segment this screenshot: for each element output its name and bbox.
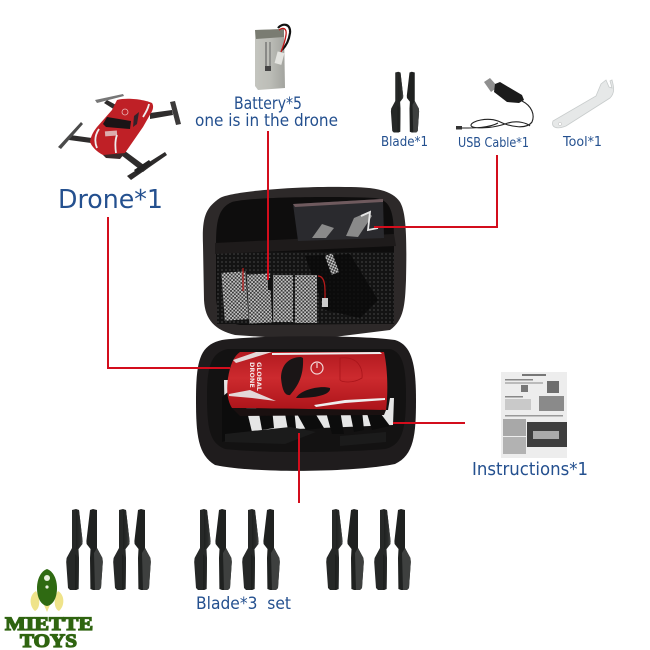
folded paper bbox=[224, 380, 394, 432]
label: usb cable: USB Cable*1 bbox=[458, 136, 529, 151]
label: instructions: Instructions*1 bbox=[472, 460, 588, 480]
logo: Miette Toys bbox=[5, 569, 93, 650]
icon: usb cable bbox=[456, 78, 533, 130]
instructions manual bbox=[501, 372, 567, 458]
logo: Miette Toys: MIETTE bbox=[5, 614, 93, 635]
label: tool: Tool*1 bbox=[562, 135, 602, 150]
mesh pocket contents bbox=[305, 253, 378, 318]
label: blade: Blade*1 bbox=[381, 135, 428, 150]
label: blade sets: Blade*3 set bbox=[196, 594, 291, 613]
label: drone: Drone*1 bbox=[58, 185, 163, 215]
icon: drone bbox=[58, 94, 181, 180]
case upper lid bbox=[203, 187, 406, 340]
label: battery: Battery*5 bbox=[234, 94, 302, 113]
icon: battery bbox=[255, 25, 290, 90]
spare batteries bbox=[221, 268, 328, 324]
red car drone bbox=[227, 352, 387, 416]
red car drone: DRONE bbox=[248, 362, 256, 388]
blades in tray bbox=[222, 382, 390, 446]
callout line: battery bbox=[267, 131, 269, 280]
case lower tray bbox=[196, 336, 416, 471]
callout line: blades bbox=[298, 433, 300, 503]
callout line: instructions bbox=[393, 422, 465, 424]
callout line: drone bbox=[108, 217, 230, 368]
label: battery: one is in the drone bbox=[195, 111, 338, 130]
blades: three sets bbox=[66, 509, 411, 590]
callout line: usb cable bbox=[374, 155, 497, 227]
icon: single blade pair bbox=[391, 72, 419, 132]
red car drone: GLOBAL bbox=[255, 362, 263, 391]
label: battery bbox=[195, 94, 338, 130]
icon: tool bbox=[553, 80, 614, 128]
parts bag bbox=[293, 199, 384, 241]
carrying case bbox=[196, 187, 416, 471]
